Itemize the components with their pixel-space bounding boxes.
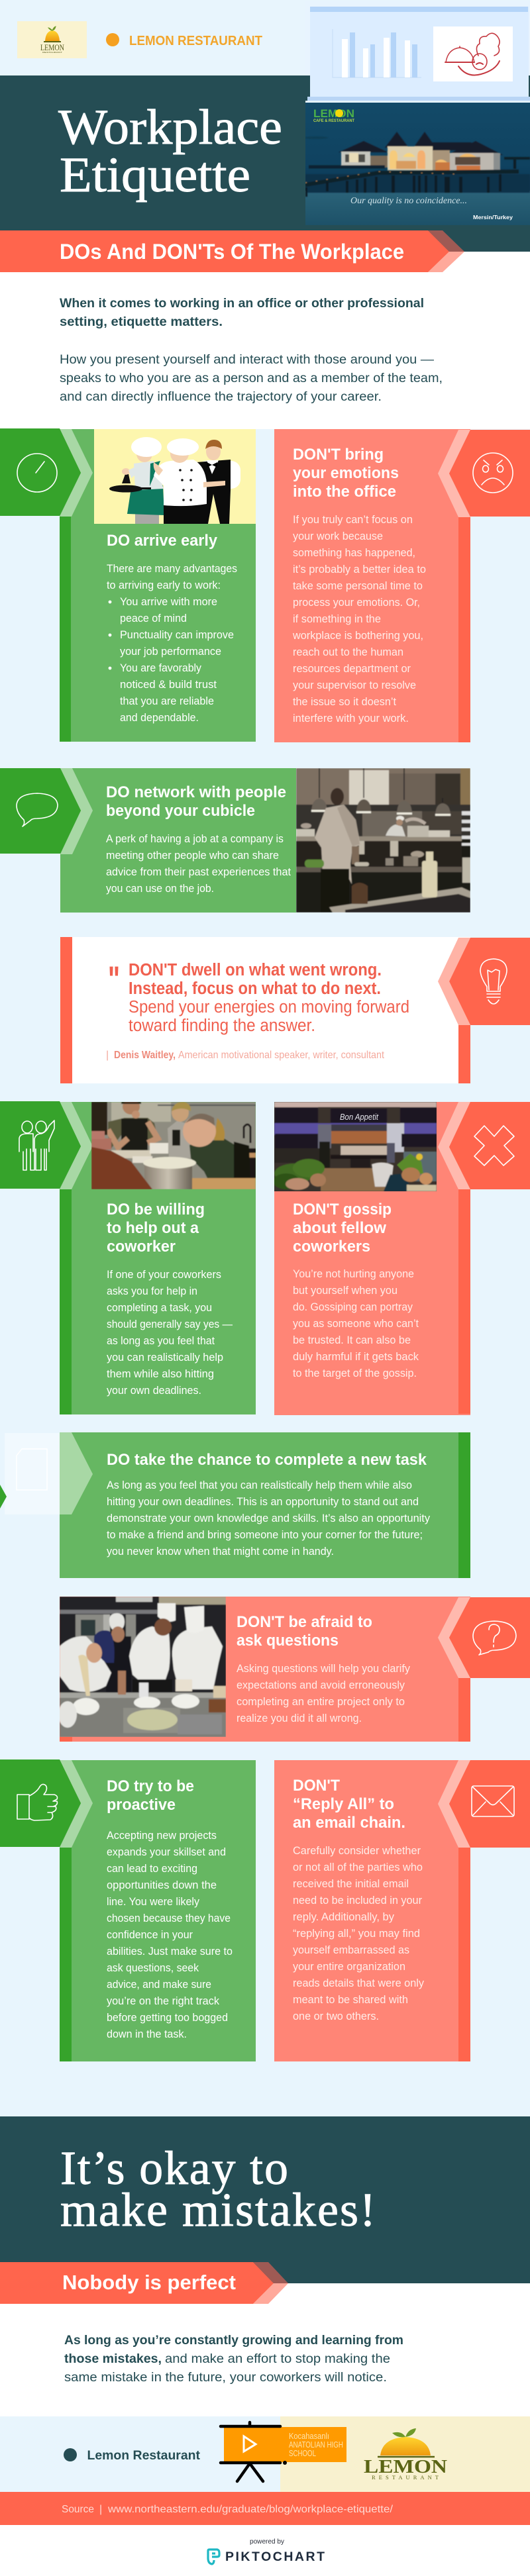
heading: DON'T [293, 1777, 340, 1795]
closing text [64, 2334, 403, 2385]
header brand dot and name: LEMON RESTAURANT [129, 33, 262, 48]
header brand logo [17, 21, 87, 58]
restaurant night photo [305, 103, 530, 225]
photo: open kitchen with chalkboards: Bon Appetit [340, 1112, 379, 1122]
body text: reply. Additionally, by [293, 1911, 395, 1923]
presentation board icon: Kocahasanlı [289, 2432, 329, 2441]
body text: abilities. Just make sure to [107, 1946, 233, 1957]
ribbon: nobody is perfect: Nobody is perfect [62, 2271, 236, 2294]
closing text: and make an effort to stop making the [165, 2352, 390, 2366]
body text: interfere with your work. [293, 713, 409, 724]
body text: do. Gossiping can portray [293, 1301, 413, 1313]
body text [106, 833, 291, 895]
body text and bullets: noticed & build trust [120, 679, 217, 691]
heading: proactive [107, 1796, 176, 1814]
body text: asks you for help in [107, 1285, 197, 1297]
white closing background [0, 2283, 530, 2416]
body text: be trusted. It can also be [293, 1334, 411, 1346]
body text: you never know when that might come in handy. [107, 1546, 334, 1558]
quote mark: " [108, 958, 120, 1000]
intro text: setting, etiquette matters. [60, 315, 223, 329]
body text: completing an entire project only to [237, 1696, 405, 1708]
chart image with chef logo [305, 1, 530, 103]
body text: hitting your own deadlines. This is an opportunity to stand out and [107, 1496, 419, 1508]
body text: the issue so it doesn’t [293, 696, 396, 708]
body text and bullets: You are favorably [120, 662, 202, 674]
body text: realize you did it all wrong. [237, 1712, 362, 1724]
body text: reach out to the human [293, 646, 403, 658]
body text: your work because [293, 530, 383, 542]
heading [106, 783, 286, 820]
body text: demonstrate your own knowledge and skills. It’s also an opportunity [107, 1512, 431, 1524]
photo: chefs plating [60, 1597, 226, 1737]
body text and bullets: There are many advantages [107, 563, 237, 575]
panel: don't be afraid to ask [58, 1597, 530, 1742]
photo: kitchen [296, 768, 470, 913]
intro text: How you present yourself and interact with those around you — [60, 353, 434, 367]
source bar [0, 2492, 530, 2525]
body text: down in the task. [107, 2028, 187, 2040]
body text [293, 1845, 425, 2022]
body text: but yourself when you [293, 1285, 398, 1297]
powered by piktochart [208, 2538, 325, 2564]
attribution [106, 1050, 384, 1061]
presentation board icon: SCHOOL [289, 2449, 316, 2458]
closing title [60, 2142, 376, 2236]
header brand logo: LEMON [40, 42, 64, 52]
body text: need to be included in your [293, 1895, 422, 1907]
body text: yourself embarrassed as [293, 1944, 409, 1956]
main title: Etiquette [60, 148, 250, 203]
source bar: Source [62, 2504, 94, 2515]
body text: workplace is bothering you, [292, 630, 423, 642]
heading [107, 1777, 194, 1814]
icon: two people [19, 1120, 54, 1170]
body text: You’re not hurting anyone [293, 1268, 414, 1280]
body text: A perk of having a job at a company is [106, 833, 284, 845]
body text [293, 1268, 419, 1379]
body text: can lead to exciting [107, 1863, 197, 1875]
heading [237, 1613, 372, 1650]
body text: them while also hitting [107, 1368, 214, 1380]
body text: if something in the [293, 613, 381, 625]
source bar: www.northeastern.edu/graduate/blog/workplace-etiquette/ [107, 2504, 394, 2515]
panel: don't reply all [274, 1760, 530, 2061]
heading: DON'T be afraid to [237, 1613, 372, 1631]
powered by piktochart: PIKTOCHART [225, 2550, 325, 2564]
body text: Carefully consider whether [293, 1845, 421, 1857]
closing title: make mistakes! [60, 2183, 376, 2236]
quote text: Instead, focus on what to do next. [129, 979, 381, 998]
closing text: As long as you’re constantly growing and learning from [64, 2334, 403, 2348]
ribbon: dos and don'ts: DOs And DON'Ts Of The Workplace [60, 240, 404, 264]
restaurant night photo: Mersin/Turkey [473, 214, 513, 221]
body text: expectations and avoid erroneously [237, 1679, 405, 1691]
main title [58, 100, 282, 203]
panel: don't bring emotions [274, 429, 530, 742]
heading: coworker [107, 1238, 176, 1256]
body text: opportunities down the [107, 1879, 217, 1891]
icon: envelope [472, 1786, 514, 1816]
restaurant night photo: LEMON [313, 107, 354, 120]
body text: If you truly can’t focus on [293, 514, 413, 526]
body text: take some personal time to [293, 580, 423, 592]
closing text: same mistake in the future, your coworkers will notice. [64, 2371, 387, 2385]
footer bar [0, 2416, 530, 2492]
panel: quote don't dwell [60, 937, 530, 1083]
body text: meeting other people who can share [106, 850, 279, 862]
illustration: restaurant staff [94, 429, 256, 524]
source bar: | [99, 2504, 102, 2515]
body text: your entire organization [293, 1961, 405, 1973]
body text: duly harmful if it gets back [293, 1351, 419, 1363]
icon: light bulb [480, 959, 507, 1004]
body text: As long as you feel that you can realistically help them while also [107, 1479, 412, 1491]
body text and bullets [107, 563, 237, 724]
body text [237, 1663, 411, 1724]
quote text [129, 961, 409, 1035]
body text: completing a task, you [107, 1302, 212, 1314]
panel: do try to be proactive [0, 1759, 256, 2061]
main title: Workplace [58, 100, 282, 155]
heading: DO network with people [106, 783, 286, 801]
heading: DO take the chance to complete a new task [107, 1451, 427, 1469]
white bottom background [0, 2525, 530, 2576]
presentation board icon [221, 2422, 346, 2481]
heading: coworkers [293, 1238, 370, 1256]
body text: to the target of the gossip. [293, 1367, 417, 1379]
heading: to help out a [107, 1219, 199, 1237]
body text [107, 1830, 233, 2040]
header brand logo: RESTAURANT [42, 51, 62, 54]
heading [293, 1777, 405, 1832]
body text: or not all of the parties who [293, 1861, 423, 1873]
presentation board icon: ANATOLIAN HIGH [289, 2440, 343, 2450]
heading: into the office [293, 483, 396, 501]
closing band [0, 2116, 530, 2283]
powered by piktochart: powered by [250, 2538, 285, 2546]
body text: expands your skillset and [107, 1846, 226, 1858]
icon: document [17, 1449, 47, 1490]
body text and bullets: peace of mind [120, 613, 187, 624]
lemon restaurant logo: LEMON [364, 2457, 447, 2477]
intro text: speaks to who you are as a person and as a member of the team, [60, 372, 443, 385]
heading: DON'T gossip [293, 1201, 392, 1218]
body text: you’re on the right track [107, 1995, 220, 2007]
lemon restaurant logo [364, 2428, 447, 2481]
body text: to make a friend and bring someone into your corner for the future; [107, 1529, 423, 1541]
body text: your own deadlines. [107, 1385, 201, 1397]
body text: advice, and make sure [107, 1979, 211, 1991]
body text: you can realistically help [107, 1352, 223, 1363]
panel: do arrive early [0, 428, 256, 742]
panel: don't gossip [273, 1102, 530, 1415]
heading: “Reply All” to [293, 1795, 394, 1813]
attribution: American motivational speaker, writer, consultant [178, 1050, 384, 1061]
body text: something has happened, [293, 547, 415, 559]
body text: line. You were likely [107, 1896, 200, 1908]
heading: about fellow [293, 1219, 387, 1237]
body text: process your emotions. Or, [293, 597, 420, 609]
closing text: those mistakes, [64, 2352, 162, 2366]
intro text: When it comes to working in an office or other professional [60, 297, 424, 311]
ribbon: nobody is perfect [0, 2262, 288, 2304]
body text: you as someone who can’t [293, 1318, 419, 1330]
icon: x mark [474, 1126, 514, 1165]
intro text [60, 297, 443, 404]
body text: received the initial email [293, 1878, 409, 1890]
icon: thumbs up [17, 1784, 57, 1820]
body text: reads details that were only [293, 1977, 425, 1989]
body text: chosen because they have [107, 1912, 231, 1924]
white intro background [0, 252, 530, 429]
photo: tasting at the pot [91, 1102, 256, 1189]
quote text: toward finding the answer. [129, 1016, 315, 1035]
body text and bullets: your job performance [120, 646, 221, 658]
body text: confidence in your [107, 1929, 193, 1941]
panel: do take the chance [0, 1432, 470, 1578]
attribution: Denis Waitley, [114, 1050, 176, 1061]
body text: should generally say yes — [107, 1318, 233, 1330]
body text [292, 514, 426, 724]
body text: it’s probably a better idea to [293, 564, 426, 575]
body text and bullets: to arriving early to work: [107, 579, 221, 591]
body text: as long as you feel that [107, 1335, 215, 1347]
icon: clock [17, 454, 57, 492]
body text: advice from their past experiences that [106, 866, 291, 878]
body text: Accepting new projects [107, 1830, 217, 1842]
body text: one or two others. [293, 2010, 379, 2022]
heading: DO arrive early [107, 532, 217, 550]
body text: your supervisor to resolve [293, 679, 416, 691]
body text [107, 1269, 233, 1397]
heading [293, 1201, 392, 1256]
lemon restaurant logo: RESTAURANT [372, 2474, 439, 2481]
photo: open kitchen with chalkboards [274, 1102, 437, 1191]
body text: resources department or [293, 663, 411, 675]
body text [107, 1479, 431, 1558]
intro text: and can directly influence the trajectory of your career. [60, 390, 382, 404]
heading: DO try to be [107, 1777, 194, 1795]
body text and bullets: You arrive with more [120, 596, 217, 608]
icon: piktochart mark [208, 2550, 219, 2564]
body text and bullets: and dependable. [120, 712, 199, 724]
panel: do network [0, 768, 470, 913]
restaurant night photo: Our quality is no coincidence... [350, 196, 467, 206]
body text and bullets: that you are reliable [120, 695, 214, 707]
heading: an email chain. [293, 1814, 405, 1832]
panel: do be willing [0, 1099, 256, 1414]
heading: DON'T bring [293, 446, 384, 464]
title band [0, 75, 530, 252]
heading [107, 1201, 205, 1256]
heading: DO be willing [107, 1201, 205, 1218]
body text and bullets: Punctuality can improve [120, 629, 234, 641]
heading: beyond your cubicle [106, 802, 255, 820]
body text: Asking questions will help you clarify [237, 1663, 411, 1675]
quote text: DON'T dwell on what went wrong. [129, 961, 382, 979]
heading: your emotions [293, 464, 399, 482]
ribbon: dos and don'ts [0, 230, 464, 272]
heading: ask questions [237, 1632, 339, 1650]
attribution: | [106, 1050, 109, 1061]
body text: meant to be shared with [293, 1994, 408, 2006]
body text: “replying all,” you may find [293, 1928, 420, 1940]
icon: question bubble [473, 1621, 516, 1655]
heading [293, 446, 399, 501]
body text: before getting too bogged [107, 2012, 228, 2024]
body text: you can use on the job. [106, 883, 214, 895]
brand dot and name: Lemon Restaurant [87, 2448, 200, 2463]
closing title: It’s okay to [60, 2142, 288, 2195]
icon: angry face [473, 453, 513, 493]
body text: If one of your coworkers [107, 1269, 221, 1281]
icon: speech bubble [17, 793, 58, 826]
quote text: Spend your energies on moving forward [129, 998, 409, 1016]
restaurant night photo: CAFE & RESTAURANT [313, 119, 354, 123]
body text: ask questions, seek [107, 1962, 199, 1974]
